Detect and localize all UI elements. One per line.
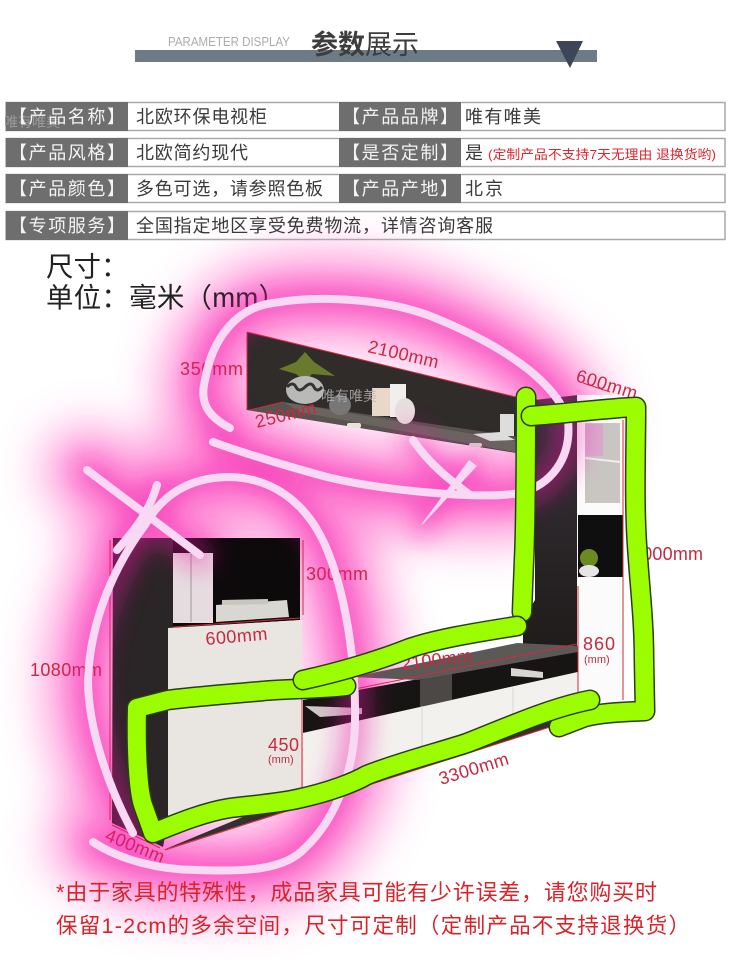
disclaimer note: *由于家具的特殊性，成品家具可能有少许误差，请您购买时 — [56, 880, 657, 905]
size heading — [46, 251, 286, 313]
label: 600mm right: 600mm — [574, 366, 640, 403]
label: 2000mm: 2000mm — [632, 544, 703, 564]
customization note: (定制产品不支持7天无理由 退换货哟) — [488, 147, 716, 162]
row: color and origin: 北京 — [465, 179, 503, 199]
furniture illustration — [112, 332, 624, 850]
disclaimer note: 保留1-2cm的多余空间，尺寸可定制（定制产品不支持退换货） — [56, 914, 690, 938]
row: style and customization: 【是否定制】 — [342, 143, 458, 163]
row: special service: 【专项服务】 — [9, 216, 125, 236]
icon: plant in vase — [279, 352, 335, 404]
pink highlight annotations — [87, 299, 568, 871]
label: 450 (mm): (mm) — [268, 754, 294, 766]
top wall shelf — [247, 332, 540, 456]
label: 860 (mm): 860 — [583, 634, 615, 654]
row: product name and brand: 【产品名称】 — [9, 107, 125, 127]
green stroke: upper left link — [303, 626, 517, 680]
tight magenta glow — [87, 299, 568, 871]
left loop highlight — [88, 477, 355, 871]
decor books — [329, 384, 515, 441]
watermark: 唯有唯美 — [321, 388, 377, 404]
row: style and customization: 是 — [465, 143, 483, 163]
parameter table — [4, 102, 725, 240]
label: 600mm left: 600mm — [205, 624, 268, 649]
size heading: 单位：毫米（mm） — [46, 282, 286, 313]
label: 300mm: 300mm — [306, 564, 368, 584]
disclaimer note — [56, 880, 690, 938]
cross slash highlight — [117, 485, 157, 550]
green annotation strokes — [137, 397, 645, 833]
slash highlight — [421, 460, 477, 525]
top loop highlight — [203, 299, 568, 495]
low TV unit — [163, 643, 590, 850]
row: style and customization — [6, 138, 725, 167]
header banner — [135, 30, 597, 68]
row: special service: 全国指定地区享受免费物流，详情咨询客服 — [136, 216, 493, 236]
row: product name and brand: 唯有唯美 — [4, 114, 60, 130]
row: product name and brand: 【产品品牌】 — [342, 107, 458, 127]
label: 2100mm shelf: 2100mm — [366, 336, 441, 372]
row: color and origin: 【产品颜色】 — [9, 179, 125, 199]
row: color and origin: 多色可选，请参照色板 — [136, 179, 323, 199]
row: color and origin — [6, 174, 725, 203]
green stroke: right cabinet outline — [531, 407, 645, 727]
check stroke highlight — [413, 440, 470, 495]
label: 250mm: 250mm — [253, 397, 318, 432]
row: style and customization: 【产品风格】 — [9, 143, 125, 163]
cross highlight — [87, 470, 200, 555]
left tall cabinet — [112, 538, 302, 847]
label: 3300mm: 3300mm — [436, 749, 511, 789]
shelf lights — [347, 423, 482, 447]
wide outer pink glow — [87, 299, 568, 871]
label: 1080mm: 1080mm — [30, 660, 102, 680]
label: 2100mm TV: 2100mm — [400, 645, 473, 674]
green stroke: lower perimeter — [137, 686, 590, 833]
size heading: 尺寸： — [46, 251, 128, 282]
row: product name and brand — [4, 102, 725, 131]
header english subtitle: PARAMETER DISPLAY — [168, 34, 290, 49]
books — [173, 553, 289, 623]
label: 450 (mm) — [268, 735, 299, 766]
row: special service — [6, 211, 725, 240]
row: style and customization: 北欧简约现代 — [136, 143, 248, 163]
label: 400mm: 400mm — [103, 825, 167, 867]
icon: triangle marker — [556, 41, 583, 68]
label: 350mm: 350mm — [180, 359, 243, 379]
label: 450 (mm): 450 — [268, 735, 299, 755]
right tall cabinet — [523, 395, 624, 705]
row: product name and brand: 北欧环保电视柜 — [136, 107, 267, 127]
icon: small potted plant — [579, 549, 599, 577]
label: 860 (mm): (mm) — [584, 654, 610, 666]
label: 860 (mm) — [583, 634, 615, 666]
dimension lines — [110, 332, 623, 850]
header title: 参数展示 — [311, 30, 419, 60]
row: product name and brand: 唯有唯美 — [465, 107, 541, 127]
row: color and origin: 【产品产地】 — [342, 179, 458, 199]
dimension lines and labels — [30, 332, 703, 867]
green stroke: vertical left of right cabinet — [522, 397, 526, 612]
